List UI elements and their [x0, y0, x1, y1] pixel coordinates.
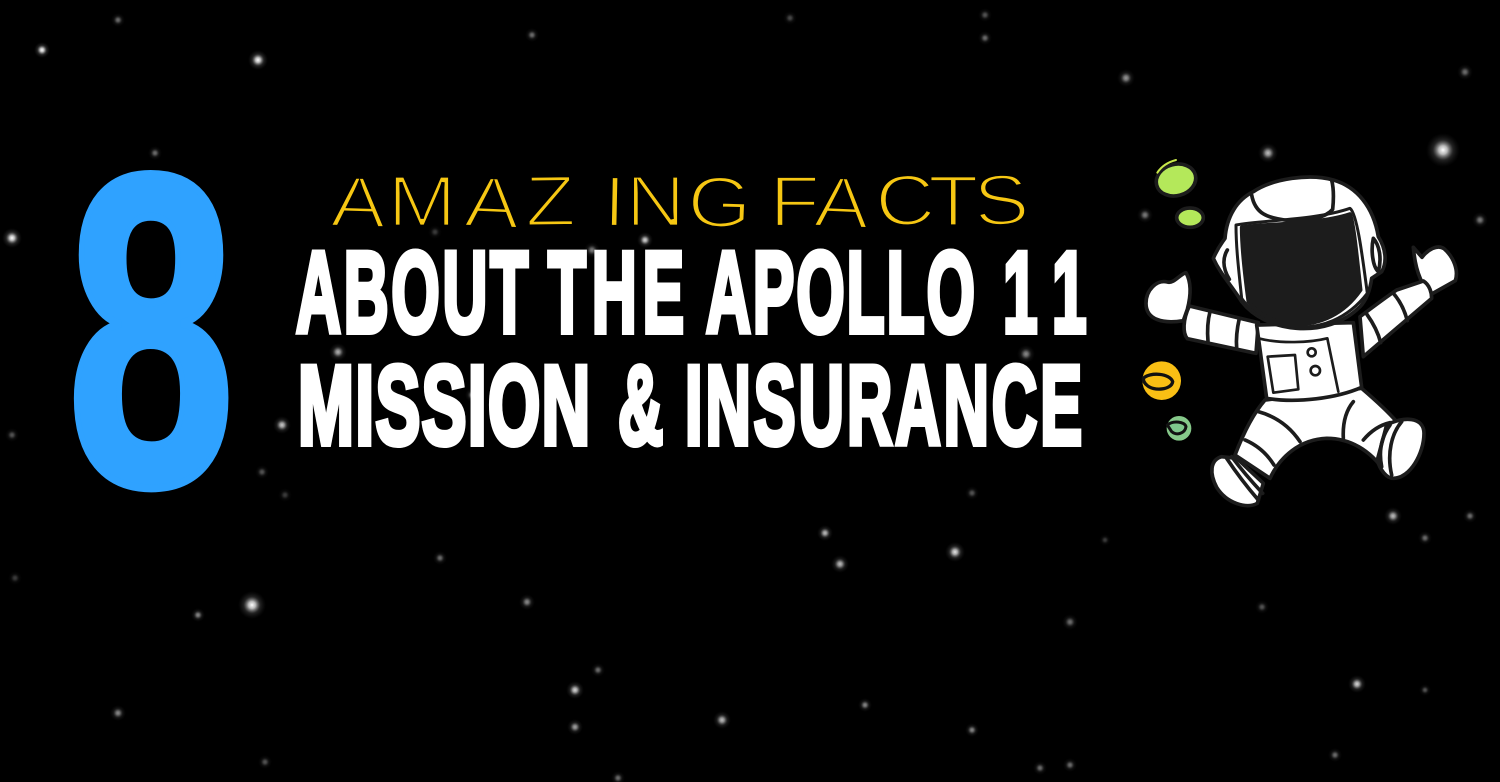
- icon: torso with chest panel: [1257, 323, 1362, 400]
- icon: green planet large: [1153, 160, 1199, 200]
- heading: mission and insurance: INSURANCE: [685, 344, 1082, 469]
- icon: right arm and glove: [1360, 247, 1456, 357]
- heading: about the apollo 11: ABOUT: [296, 227, 528, 357]
- heading: mission and insurance: &: [618, 344, 663, 469]
- heading: about the apollo 11: APOLLO: [706, 227, 975, 357]
- heading: amazing facts: AMAZING FACTS: [329, 160, 1031, 244]
- icon: floating astronaut: [1142, 160, 1456, 506]
- heading: mission and insurance: MISSION: [298, 342, 590, 468]
- heading: about the apollo 11: 1: [1003, 227, 1038, 357]
- icon: green planet small: [1177, 208, 1203, 227]
- heading: mission and insurance: [298, 342, 1082, 469]
- icon: helmet: [1213, 177, 1385, 329]
- heading: about the apollo 11: [296, 227, 1087, 357]
- icon: left arm and glove: [1146, 273, 1258, 353]
- heading: about the apollo 11: THE: [548, 227, 684, 357]
- icon: yellow planet: [1142, 361, 1181, 400]
- big number 8: 8: [67, 83, 235, 579]
- icon: legs: [1212, 388, 1424, 506]
- heading: about the apollo 11: 1: [1052, 227, 1087, 357]
- icon: green ring planet: [1167, 416, 1191, 441]
